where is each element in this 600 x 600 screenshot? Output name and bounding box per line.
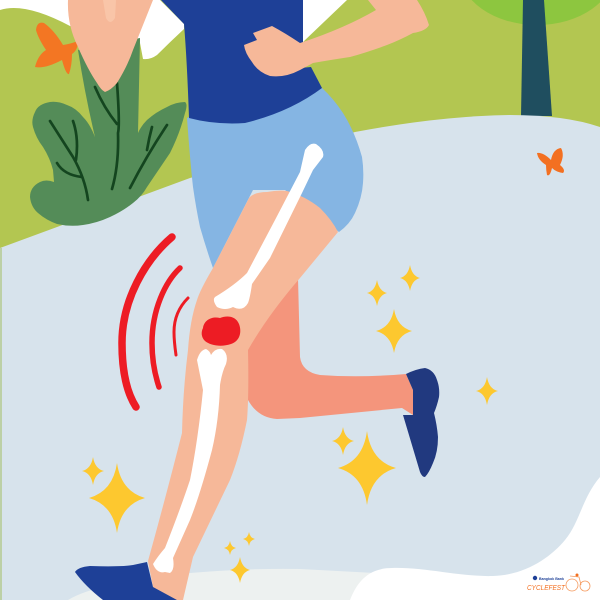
bottom gray path [68,569,375,600]
logo: Bangkok Bank Cyclefest: CYCLEFEST [527,583,566,592]
tibia bone [153,349,227,573]
femur bone [214,144,323,309]
background: green hill [0,0,600,260]
butterfly: small orange [537,148,564,175]
sparkles [82,265,498,583]
runner left arm [68,0,153,92]
pain arc: medium [152,268,180,387]
runner far leg [240,278,413,419]
logo: Bangkok Bank Cyclefest: Bangkok Bank [539,576,565,581]
pain arc: small [174,298,188,355]
runner shorts [187,88,363,268]
bottom white corner [350,477,600,600]
knee pain spot [202,316,240,346]
tree [459,0,600,116]
near shoe [75,562,177,600]
left edge strip [0,248,2,600]
white gap behind arm [140,0,347,59]
runner right arm and fist [244,0,429,76]
plant [30,38,186,226]
pain arc: large [122,237,172,407]
logo: Bangkok Bank Cyclefest [527,574,590,592]
far shoe [403,368,439,477]
butterfly: large orange [35,23,78,74]
runner near leg [148,191,338,600]
plant veins [50,83,167,200]
runner shirt [161,0,322,123]
